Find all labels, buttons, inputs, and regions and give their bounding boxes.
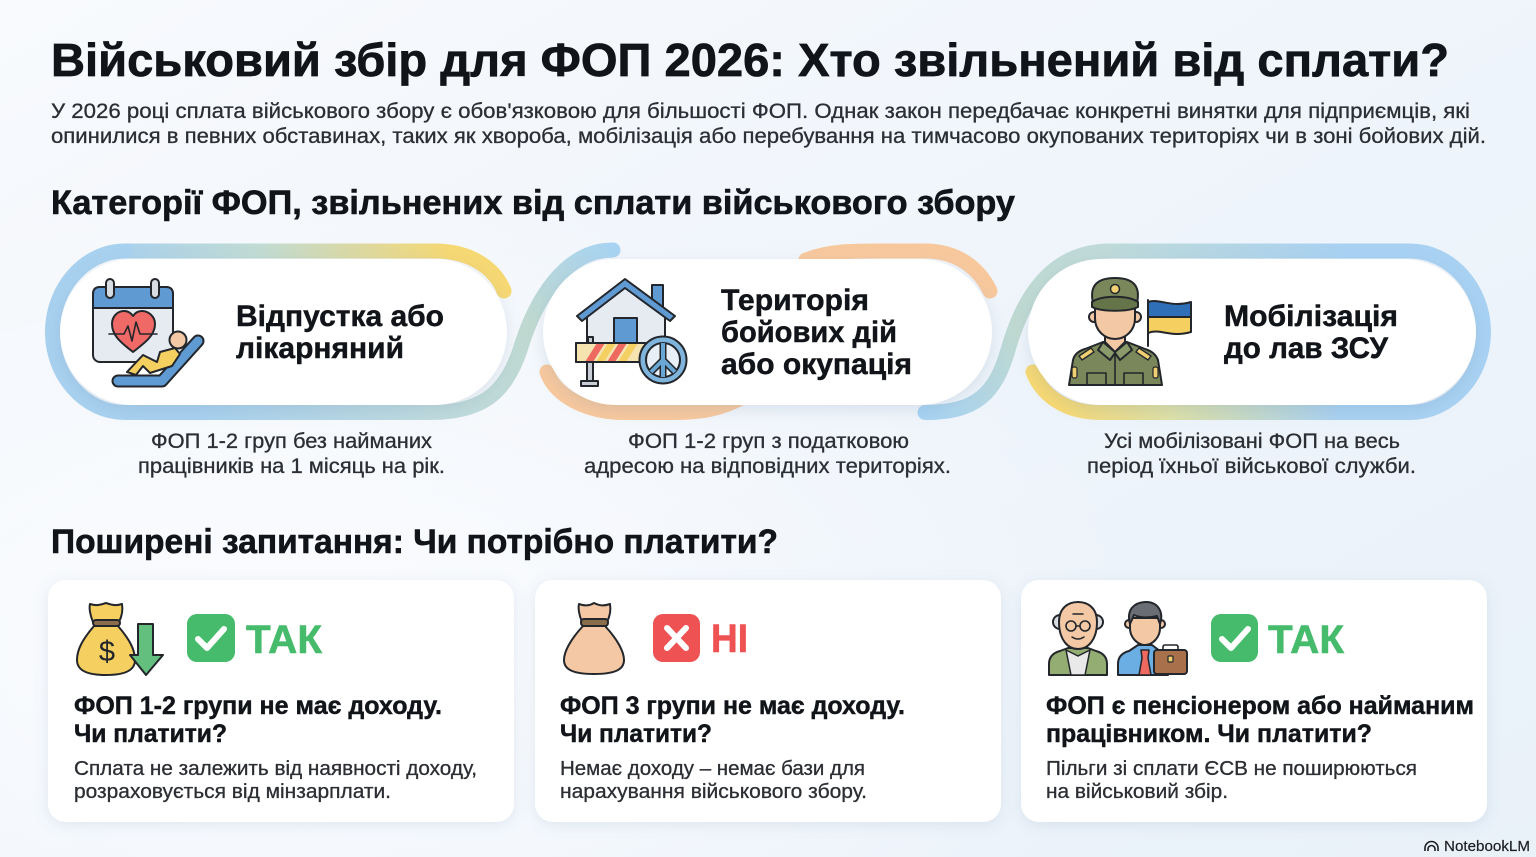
label: mobilization: до лав ЗСУ bbox=[1224, 332, 1388, 365]
answer: Немає доходу – немає бази для bbox=[560, 758, 865, 780]
description: mobilization: період їхньої військової служби. bbox=[1087, 455, 1416, 478]
answer: Пільги зі сплати ЄСВ не поширюються bbox=[1046, 758, 1417, 780]
label: mobilization: Мобілізація bbox=[1224, 300, 1398, 333]
panel: combat or occupied territory bbox=[543, 259, 992, 405]
description: combat or occupied territory bbox=[584, 430, 951, 478]
intro text: У 2026 році сплата військового збору є обов'язковою для більшості ФОП. Однак закон передбачає конкретні винятки для підприємців, які bbox=[51, 99, 1470, 123]
description: leave or sick leave bbox=[138, 430, 445, 478]
ribbon connecting the category pills bbox=[52, 250, 1484, 412]
answer: Сплата не залежить від наявності доходу, bbox=[74, 758, 477, 780]
label: leave or sick leave: Відпустка або bbox=[236, 300, 444, 333]
icon: soldier with Ukrainian flag bbox=[1069, 278, 1191, 385]
description: combat or occupied territory: ФОП 1-2 груп з податковою bbox=[628, 430, 909, 453]
question bbox=[74, 692, 442, 748]
panel: FAQ pensioner or employee bbox=[1021, 580, 1487, 822]
question: працівником. Чи платити? bbox=[1046, 720, 1372, 748]
intro text bbox=[51, 99, 1486, 148]
badge: yes bbox=[1211, 614, 1345, 662]
heading: FAQ: Поширені запитання: Чи потрібно платити? bbox=[51, 523, 778, 561]
description: leave or sick leave: працівників на 1 місяць на рік. bbox=[138, 455, 445, 478]
NotebookLM logo: NotebookLM bbox=[1444, 838, 1530, 855]
question bbox=[560, 692, 905, 748]
description: leave or sick leave: ФОП 1-2 груп без найманих bbox=[151, 430, 433, 453]
title: Військовий збір для ФОП 2026: Хто звільнений від сплати? bbox=[51, 34, 1449, 86]
icon: money bag with down arrow: $ bbox=[99, 636, 115, 668]
icon: money bag with down arrow bbox=[77, 603, 163, 675]
badge: yes bbox=[187, 614, 323, 662]
badge: no: НІ bbox=[711, 617, 748, 661]
panel: mobilization bbox=[1028, 259, 1476, 405]
label: combat or occupied territory: або окупація bbox=[721, 348, 912, 381]
question: ФОП 3 групи не має доходу. bbox=[560, 692, 905, 720]
description: mobilization bbox=[1087, 430, 1416, 478]
question: ФОП 1-2 групи не має доходу. bbox=[74, 692, 442, 720]
label: mobilization bbox=[1224, 300, 1398, 365]
icon: calendar with heart and patient bbox=[93, 279, 198, 381]
label: combat or occupied territory: Територія bbox=[721, 284, 869, 317]
question: Чи платити? bbox=[74, 720, 227, 748]
badge: no bbox=[653, 614, 748, 662]
question: ФОП є пенсіонером або найманим bbox=[1046, 692, 1474, 720]
label: combat or occupied territory: бойових дій bbox=[721, 316, 897, 349]
icon: house, barrier and peace sign bbox=[576, 279, 686, 386]
label: leave or sick leave: лікарняний bbox=[236, 332, 404, 365]
panel: FAQ group 3 no income bbox=[535, 580, 1001, 822]
label: leave or sick leave bbox=[236, 300, 444, 365]
answer bbox=[1046, 758, 1417, 803]
answer bbox=[74, 758, 477, 803]
panel: leave or sick leave bbox=[60, 259, 507, 405]
icon: empty money bag bbox=[564, 603, 624, 674]
heading: categories: Категорії ФОП, звільнених від сплати військового збору bbox=[51, 184, 1015, 222]
badge: yes: ТАК bbox=[1268, 618, 1345, 662]
answer: на військовий збір. bbox=[1046, 781, 1228, 803]
answer: розраховується від мінзарплати. bbox=[74, 781, 391, 803]
question: Чи платити? bbox=[560, 720, 712, 748]
label: combat or occupied territory bbox=[721, 284, 912, 381]
panel: FAQ group 1-2 no income bbox=[48, 580, 514, 822]
description: combat or occupied territory: адресою на відповідних територіях. bbox=[584, 455, 951, 478]
description: mobilization: Усі мобілізовані ФОП на весь bbox=[1104, 430, 1400, 453]
answer bbox=[560, 758, 867, 803]
question bbox=[1046, 692, 1474, 748]
intro text: опинилися в певних обставинах, таких як хвороба, мобілізація або перебування на тимчасово окупованих територіях чи в зоні бойових дій. bbox=[51, 124, 1486, 148]
badge: yes: ТАК bbox=[246, 618, 323, 662]
answer: нарахування військового збору. bbox=[560, 781, 867, 803]
icon: pensioner and employee bbox=[1049, 602, 1187, 675]
